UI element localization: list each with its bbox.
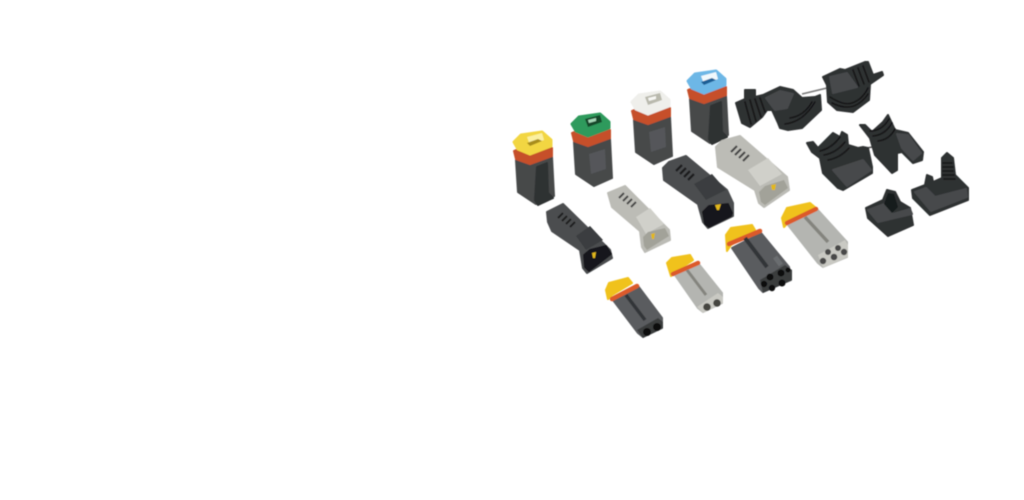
boot: elbow pair with tether	[736, 62, 883, 130]
receptacle: small grey two-way	[667, 255, 723, 313]
connector: blue cap	[688, 71, 728, 144]
receptacle: dark six-way	[726, 225, 792, 293]
receptacle: grey six-way	[782, 203, 848, 268]
plug: large dark	[663, 156, 733, 228]
clip: tall mount	[912, 153, 968, 215]
plug: large grey	[716, 136, 789, 207]
plug: small grey	[608, 186, 670, 252]
receptacle: small dark two-way	[606, 278, 663, 338]
connector: green cap	[572, 114, 612, 186]
plug: small dark	[547, 204, 612, 273]
connector: yellow cap	[514, 132, 554, 205]
clip: small mount	[866, 190, 913, 236]
connector: white cap	[632, 92, 672, 164]
boot: straight clip pair	[807, 115, 923, 190]
